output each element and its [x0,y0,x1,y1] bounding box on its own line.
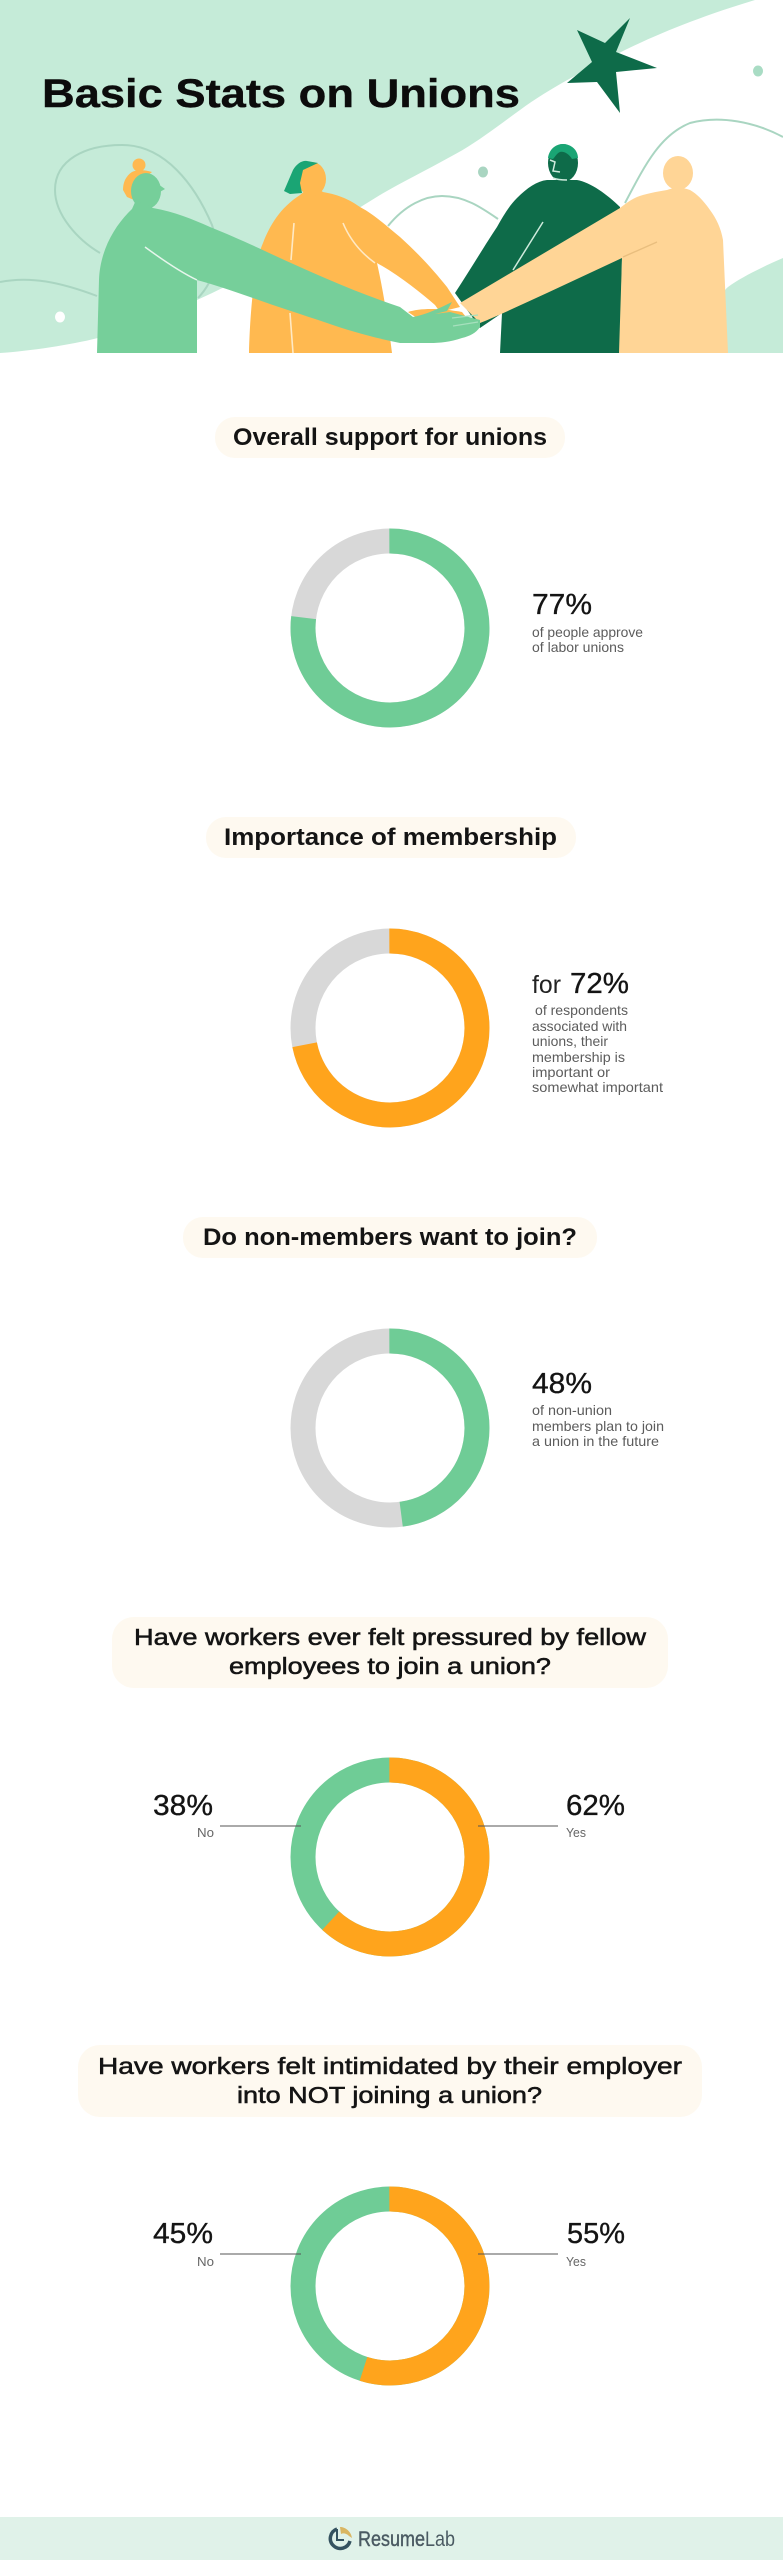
person: green figure [97,158,480,353]
stat: 77%: 77% [532,589,592,621]
callout: no 45%: No [197,2254,214,2269]
decorative dot left [55,312,65,322]
stat: 48%: 48% [532,1368,592,1400]
decorative dot middle [478,166,488,178]
logo wordmark: ResumeLab [358,2528,455,2551]
callout: yes 55%: 55% [567,2218,625,2250]
donut chart: 72% [303,941,477,1115]
panel: importance of membership [206,817,663,1115]
stat: 48%: of non-union [532,1402,612,1418]
heading pill: Overall support for unions [233,424,547,451]
stat: 72%: associated with [532,1018,627,1034]
heading pill [183,1217,597,1258]
person: peach figure [460,156,728,353]
heading pill: Do non-members want to join? [203,1224,577,1251]
callout: yes 62%: Yes [566,1825,586,1840]
heading pill: Have workers ever felt pressured by fellow [134,1624,647,1650]
stat: 77%: of people approve [532,624,643,640]
stat: 72%: 72% [570,968,629,1000]
decorative dot right [753,66,763,76]
heading pill: Importance of membership [224,824,557,851]
stat: 72% [532,968,663,1095]
callout: no 38%: No [197,1825,214,1840]
icon: ResumeLab logo [330,2527,352,2548]
mint background swoosh [0,0,755,353]
footer band [0,2517,783,2560]
heading pill: Have workers felt intimidated by their employer [98,2053,682,2079]
decorative thin curves [0,120,783,298]
person: dark green figure [455,144,622,353]
stat: 72%: membership is [532,1049,625,1065]
icon: star [567,18,657,113]
stat: 48% [532,1368,664,1449]
stat: 72%: unions, their [532,1033,608,1049]
callout: yes 62%: 62% [566,1790,625,1822]
heading pill: employees to join a union? [229,1653,551,1679]
stat: 72%: for [532,971,561,999]
callout: yes 55%: Yes [566,2254,586,2269]
heading pill [78,2045,702,2117]
donut chart: 55 / 45 [303,2199,477,2373]
panel: intimidated by employer [78,2045,702,2373]
heading pill [112,1617,668,1688]
title: Basic Stats on Unions [42,72,520,116]
callout: no 45%: 45% [153,2218,213,2250]
donut chart: 77% [303,541,477,715]
stat: 72%: important or [532,1064,610,1080]
stat: 77% [532,589,643,655]
callout: yes 62% [478,1790,625,1840]
panel: overall support [215,417,643,715]
person: orange figure [249,161,470,353]
heading pill [206,817,576,858]
heading pill: into NOT joining a union? [237,2082,542,2108]
callout: yes 55% [478,2218,625,2269]
stat: 72%: of respondents [535,1002,628,1018]
callout: no 38%: 38% [153,1790,213,1822]
panel: header illustration [0,0,783,353]
callout: no 45% [153,2218,301,2269]
stat: 48%: members plan to join [532,1418,664,1434]
stat: 72%: somewhat important [532,1079,663,1095]
callout: no 38% [153,1790,301,1840]
panel: do non-members want to join [183,1217,664,1515]
panel: pressured by fellow employees [112,1617,668,1944]
donut chart: 48% [303,1341,477,1515]
donut chart: 62 / 38 [303,1770,477,1944]
stat: 77%: of labor unions [532,639,624,655]
stat: 48%: a union in the future [532,1433,659,1449]
heading pill [215,417,565,458]
mint blob bottom right [716,258,783,353]
